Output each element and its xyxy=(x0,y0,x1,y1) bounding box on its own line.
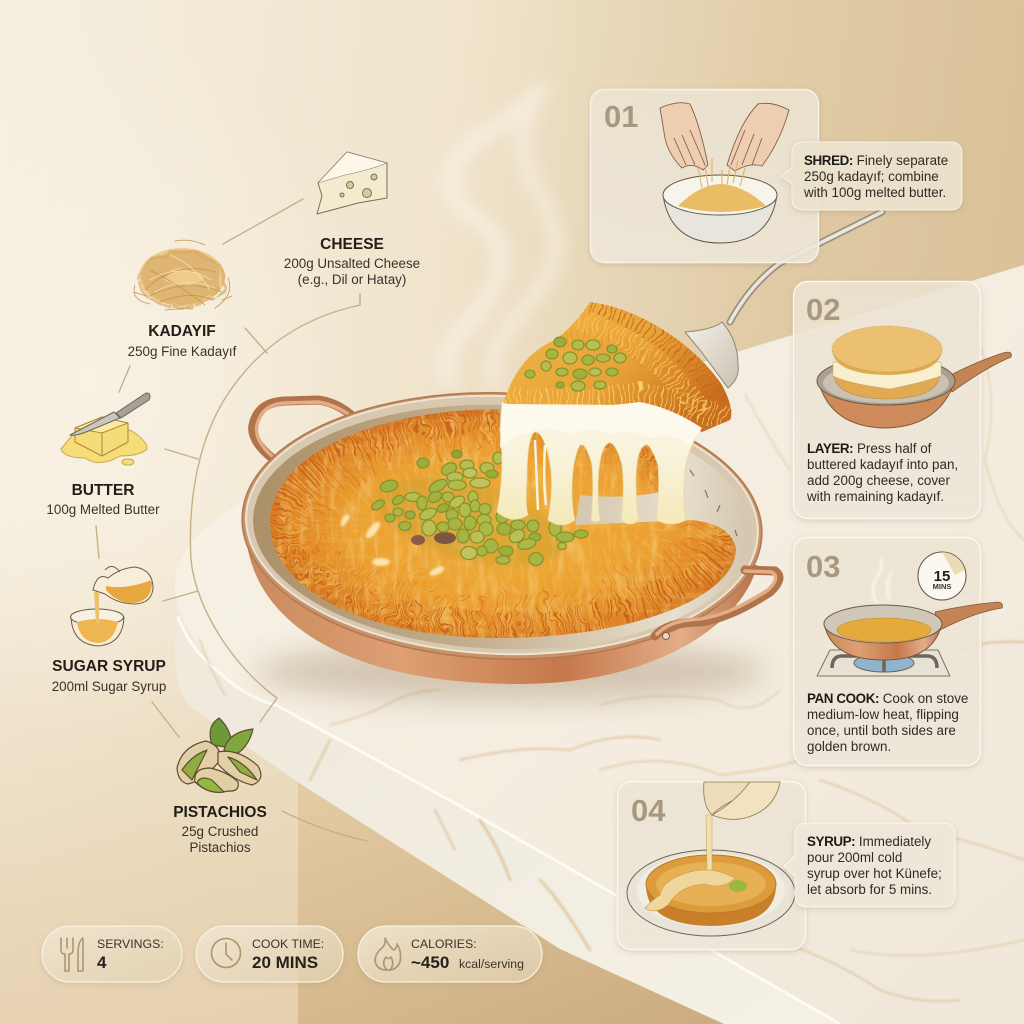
description: pistachios: 25g Crushed xyxy=(182,824,258,839)
text: pan cook: PAN COOK: Cook on stove xyxy=(807,691,968,706)
illustration: pan on gas stove xyxy=(817,602,1002,676)
pan shadow on counter xyxy=(255,642,765,702)
ingredient: kadayif xyxy=(128,240,237,359)
right handle xyxy=(655,570,779,636)
text: pan cook: medium-low heat, flipping xyxy=(807,707,959,722)
icon: melted butter and knife xyxy=(61,393,150,465)
label: sugar syrup: SUGAR SYRUP xyxy=(52,658,166,675)
ingredient: cheese xyxy=(284,152,420,287)
icon: cheese wedge xyxy=(317,152,387,214)
interior speckles xyxy=(672,452,737,536)
card: step 04 xyxy=(618,782,806,950)
number: 02: 02 xyxy=(806,292,840,327)
icon: 15 minute timer xyxy=(918,552,966,600)
card: step 03 xyxy=(794,538,980,766)
pan body xyxy=(248,550,757,684)
marble counter xyxy=(172,265,1024,1024)
pistachio crumbs xyxy=(367,460,573,584)
text: servings: 4 xyxy=(97,953,107,972)
icon: jug pouring syrup into bowl xyxy=(70,566,153,646)
text: calories: kcal/serving xyxy=(459,957,524,971)
callout: shred: with 100g melted butter. xyxy=(803,185,946,200)
cheese band xyxy=(500,402,702,448)
stat pill: calories xyxy=(358,926,542,982)
text: servings: SERVINGS: xyxy=(97,937,164,951)
callout: syrup: pour 200ml cold xyxy=(807,850,902,865)
slice base xyxy=(503,302,731,432)
description: butter: 100g Melted Butter xyxy=(46,502,160,517)
label: kadayif: KADAYIF xyxy=(148,323,216,340)
butter gloss xyxy=(339,512,446,578)
ingredient arc and connector lines xyxy=(96,199,367,841)
pistachio pile xyxy=(370,450,588,566)
thin cheese threads xyxy=(535,440,546,510)
text: layer: buttered kadayıf into pan, xyxy=(807,457,958,472)
card: step 01 xyxy=(590,90,818,262)
stat pill: cook time xyxy=(196,926,343,982)
slice strands xyxy=(505,304,730,420)
illustration: layered kadayif in pan xyxy=(817,326,1011,428)
callout: syrup xyxy=(784,823,955,907)
left handle xyxy=(253,400,350,458)
spatula blade xyxy=(685,322,738,388)
text: pan cook: golden brown. xyxy=(807,739,891,754)
callout: shred: 250g kadayıf; combine xyxy=(804,169,939,184)
description: cheese: 200g Unsalted Cheese xyxy=(284,256,420,271)
label: pistachios: PISTACHIOS xyxy=(173,804,267,821)
step 04 panel xyxy=(618,782,955,950)
hero: copper pan with künefe xyxy=(238,384,779,684)
number: 03: 03 xyxy=(806,549,840,584)
icon: fork and knife xyxy=(61,938,83,971)
label: butter: BUTTER xyxy=(72,482,134,499)
illustration: syrup poured on künefe xyxy=(627,782,795,936)
step 03 panel xyxy=(794,538,1002,766)
ingredient: sugar syrup xyxy=(52,566,166,694)
label: cheese: CHEESE xyxy=(320,236,384,253)
illustration: hands over bowl xyxy=(660,103,789,243)
text: calories: CALORIES: xyxy=(411,937,477,951)
icon: flame xyxy=(375,938,401,970)
icon: clock xyxy=(212,938,240,968)
step 02 panel xyxy=(794,282,1011,518)
callout: syrup: SYRUP: Immediately xyxy=(807,834,931,849)
text: layer: with remaining kadayıf. xyxy=(806,489,944,504)
steam xyxy=(446,90,555,385)
cheese strands xyxy=(497,402,700,525)
counter side face xyxy=(172,575,840,1024)
icon: pistachios with leaves xyxy=(177,718,261,792)
number: 04: 04 xyxy=(631,793,666,828)
slice pistachios xyxy=(525,337,626,391)
pan rim xyxy=(238,384,766,668)
callout: syrup: let absorb for 5 mins. xyxy=(807,882,932,897)
description: sugar syrup: 200ml Sugar Syrup xyxy=(52,679,166,694)
künefe strands xyxy=(265,405,745,645)
icon: kadayif nest xyxy=(134,240,232,310)
text: pan cook: once, until both sides are xyxy=(807,723,956,738)
marble veins xyxy=(200,345,1024,1001)
icon: 15 minute timer: 15 xyxy=(934,568,950,585)
callout: syrup: syrup over hot Künefe; xyxy=(807,866,942,881)
callout: shred xyxy=(781,142,962,210)
steam wisps xyxy=(873,558,892,605)
text: cook time: COOK TIME: xyxy=(252,937,324,951)
ingredient: pistachios xyxy=(173,718,267,855)
künefe base xyxy=(270,409,736,638)
stat pill: servings xyxy=(42,926,182,982)
description: cheese: (e.g., Dil or Hatay) xyxy=(298,272,406,287)
spatula handle xyxy=(730,212,882,322)
text: layer: LAYER: Press half of xyxy=(807,441,931,456)
icon: 15 minute timer: MINS xyxy=(933,582,951,591)
counter edge highlight xyxy=(178,617,840,1024)
text: layer: add 200g cheese, cover xyxy=(807,473,950,488)
callout: shred: SHRED: Finely separate xyxy=(804,153,948,168)
text: cook time: 20 MINS xyxy=(252,953,318,972)
number: 01: 01 xyxy=(604,99,638,134)
description: kadayif: 250g Fine Kadayıf xyxy=(128,344,237,359)
pan interior xyxy=(249,396,755,658)
hero: lifted slice with cheese pull xyxy=(497,302,731,525)
ingredient: butter xyxy=(46,393,160,517)
text: calories: ~450 xyxy=(411,953,449,972)
step 01 panel xyxy=(590,90,962,262)
counter top surface xyxy=(175,265,1024,1024)
description: pistachios: Pistachios xyxy=(189,840,251,855)
card: step 02 xyxy=(794,282,980,518)
